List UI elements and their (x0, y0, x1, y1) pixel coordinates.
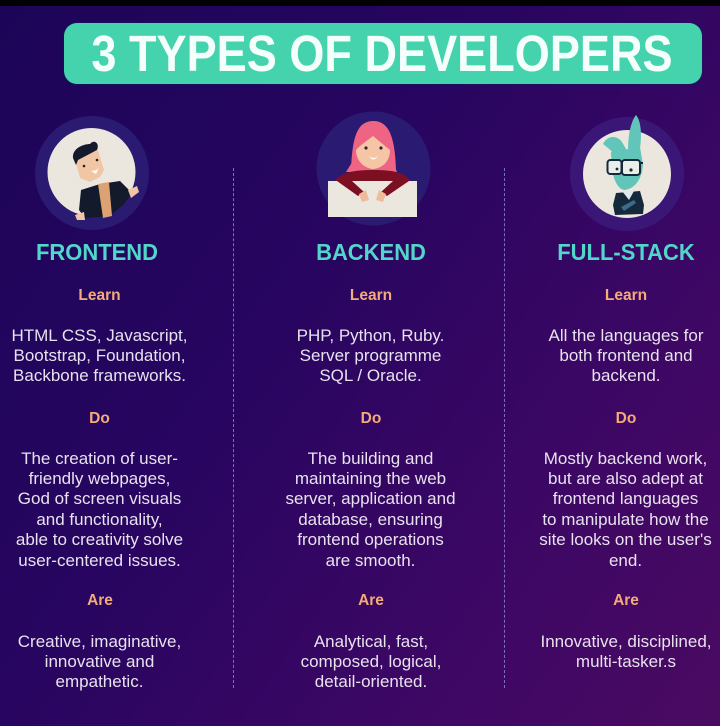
full-stack do text: Mostly backend work, (544, 448, 707, 468)
full-stack do text: to manipulate how the (542, 510, 709, 529)
icon: full-stack developer rabbit avatar (570, 115, 684, 231)
icon: backend developer avatar (316, 112, 430, 226)
full-stack do text (539, 448, 712, 570)
backend do text: are smooth. (326, 551, 415, 570)
backend learn text: SQL / Oracle. (319, 366, 422, 385)
backend do text: maintaining the web (295, 469, 446, 488)
full-stack are label: Are (613, 592, 639, 609)
backend are text: detail-oriented. (315, 672, 427, 691)
frontend learn text: Bootstrap, Foundation, (13, 346, 186, 365)
backend learn text: PHP, Python, Ruby. (297, 326, 444, 344)
frontend do text: The creation of user- (21, 448, 178, 468)
backend do text: frontend operations (297, 530, 444, 549)
full-stack do text: frontend languages (553, 489, 698, 508)
backend learn text (297, 326, 444, 385)
backend learn text: Server programme (300, 346, 441, 365)
frontend are text (18, 632, 181, 691)
backend learn label: Learn (350, 287, 392, 304)
frontend do text: and functionality, (36, 510, 163, 529)
frontend do text: friendly webpages, (29, 469, 170, 488)
frontend learn text (11, 326, 188, 385)
backend do text (285, 448, 456, 570)
frontend learn text: Backbone frameworks. (13, 366, 186, 385)
frontend do text: able to creativity solve (16, 530, 183, 549)
frontend do text (16, 448, 183, 570)
frontend do label: Do (89, 410, 110, 426)
heading: backend: BACKEND (316, 239, 426, 265)
backend are text: Analytical, fast, (314, 632, 428, 650)
full-stack do text: site looks on the user's (539, 530, 712, 549)
full-stack are text: multi-tasker.s (576, 652, 676, 671)
frontend learn label: Learn (78, 287, 121, 304)
backend do text: The building and (308, 448, 433, 468)
backend do text: server, application and (285, 489, 456, 508)
full-stack do text: end. (609, 551, 642, 570)
full-stack learn text: both frontend and (559, 346, 693, 365)
full-stack learn text (548, 326, 704, 385)
frontend are text: empathetic. (56, 672, 143, 691)
full-stack are text: Innovative, disciplined, (540, 632, 712, 650)
heading: frontend: FRONTEND (36, 239, 158, 265)
icon: frontend developer avatar (35, 116, 149, 230)
backend are text (301, 632, 441, 691)
frontend are label: Are (87, 592, 113, 609)
frontend are text: Creative, imaginative, (18, 632, 181, 650)
full-stack do label: Do (616, 410, 636, 426)
full-stack are text (540, 632, 712, 671)
full-stack learn text: All the languages for (548, 326, 704, 344)
frontend are text: innovative and (45, 652, 154, 671)
title banner: 3 TYPES OF DEVELOPERS (91, 25, 672, 82)
full-stack do text: but are also adept at (548, 469, 703, 488)
frontend do text: God of screen visuals (18, 489, 181, 508)
frontend do text: user-centered issues. (18, 551, 181, 570)
heading: full-stack: FULL-STACK (557, 239, 695, 265)
backend do label: Do (361, 410, 381, 426)
full-stack learn label: Learn (605, 287, 647, 304)
full-stack learn text: backend. (592, 366, 660, 385)
frontend learn text: HTML CSS, Javascript, (11, 326, 188, 344)
backend are label: Are (358, 592, 384, 609)
backend are text: composed, logical, (301, 652, 441, 671)
backend do text: database, ensuring (298, 510, 443, 529)
